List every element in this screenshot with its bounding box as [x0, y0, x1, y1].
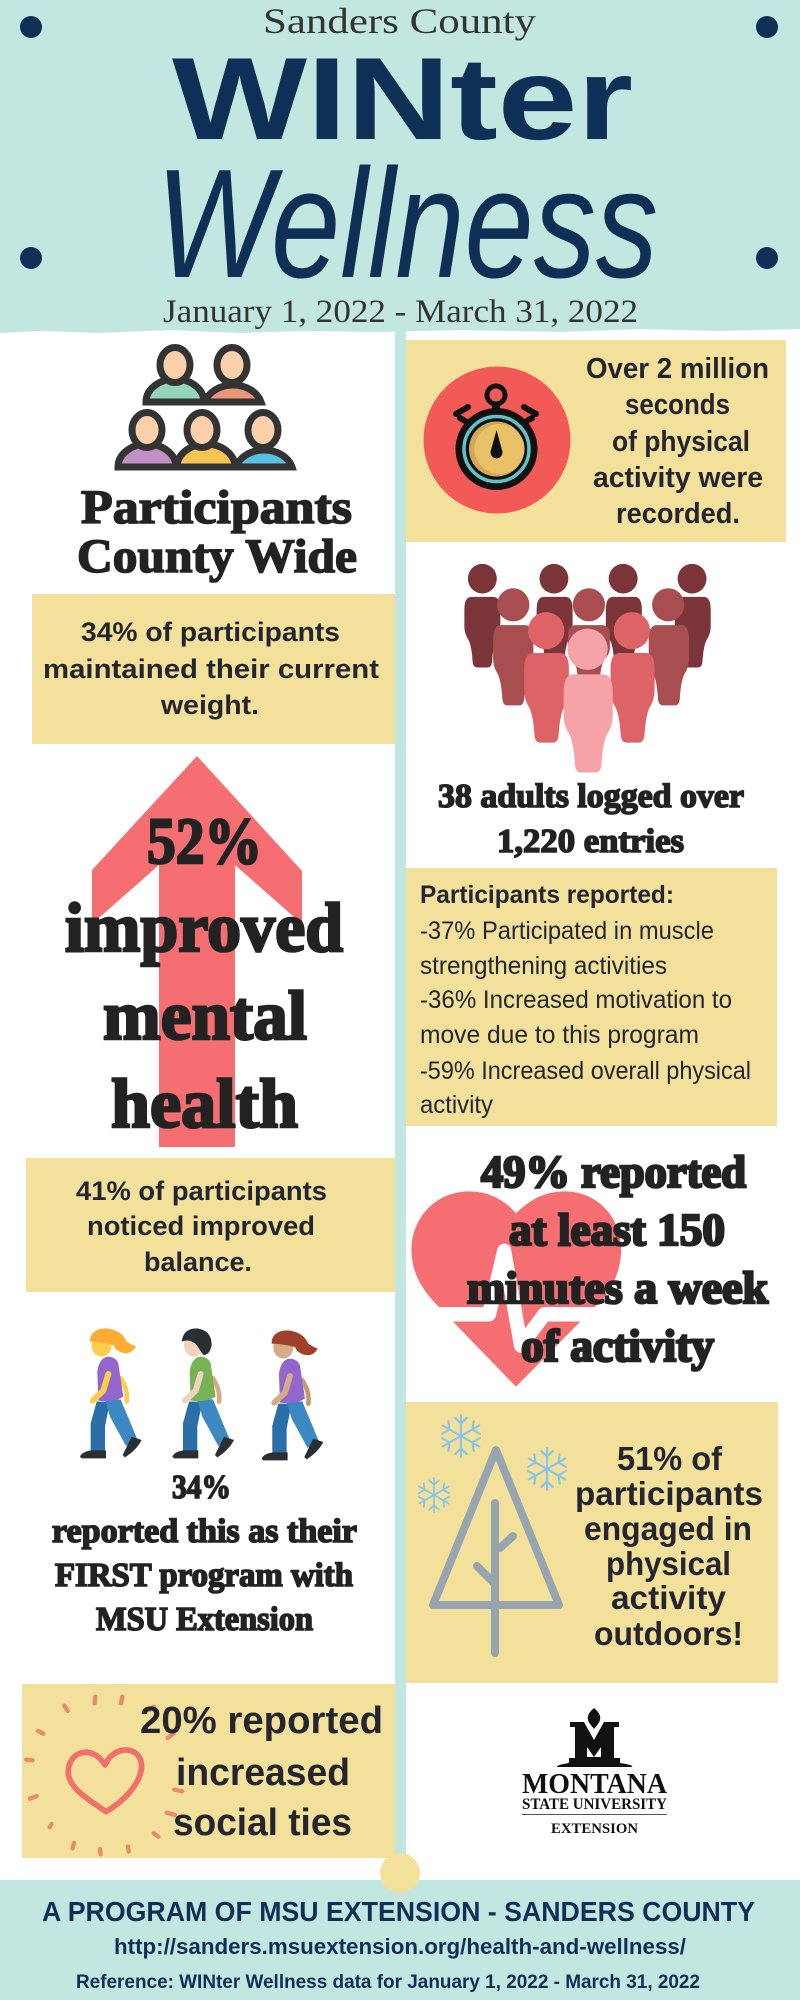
text: first program: reported this as their	[52, 1513, 357, 1550]
panel: social ties: social ties	[173, 1802, 352, 1844]
icon: heart with rays	[26, 1697, 182, 1854]
panel: seconds of physical activity	[406, 340, 786, 542]
date range: January 1, 2022 - March 31, 2022	[163, 294, 638, 330]
text: 52% improved mental health: health	[111, 1066, 298, 1143]
heading: participants county wide: County Wide	[77, 530, 357, 583]
logo: Montana State University Extension: STATE UNIVERSITY	[522, 1796, 667, 1813]
footer band	[0, 1880, 800, 2000]
panel: improved balance: balance.	[144, 1247, 252, 1277]
text: 52% improved mental health	[65, 805, 343, 1143]
heading: participants county wide: Participants	[81, 481, 352, 534]
divider end circle	[380, 1853, 420, 1893]
panel: outdoors: outdoors!	[594, 1615, 743, 1652]
footer band: http://sanders.msuextension.org/health-and-wellness/	[114, 1934, 686, 1959]
icon: group of participants	[118, 348, 292, 467]
panel: maintained weight: maintained their current	[43, 654, 379, 684]
title: Wellness: Wellness	[156, 136, 658, 310]
panel: improved balance	[26, 1158, 395, 1292]
walker two	[172, 1328, 234, 1458]
panel: social ties: increased	[176, 1752, 350, 1794]
text: 150 minutes a week: of activity	[521, 1321, 715, 1371]
text: 150 minutes a week	[467, 1147, 768, 1371]
panel: participants reported list	[406, 868, 777, 1126]
icon: M mark	[557, 1708, 632, 1767]
arrow: upward	[92, 756, 302, 1147]
text: first program: 34%	[172, 1469, 231, 1506]
text: first program: MSU Extension	[96, 1601, 313, 1638]
logo: Montana State University Extension: MONTANA	[522, 1769, 668, 1800]
icon: crowd of people	[464, 564, 711, 773]
panel: outdoors: activity	[611, 1579, 727, 1616]
panel: participants reported list: move due to this program	[420, 1021, 699, 1049]
text: 52% improved mental health: 52%	[147, 805, 262, 878]
icon: heart with pulse line	[412, 1192, 620, 1385]
panel: participants reported list: activity	[420, 1091, 493, 1119]
text: first program: FIRST program with	[55, 1557, 353, 1594]
panel: seconds of physical activity: seconds	[625, 389, 730, 421]
panel: participants reported list: strengthening activities	[420, 952, 667, 980]
text: 150 minutes a week: minutes a week	[467, 1263, 768, 1313]
panel: outdoors: 51% of	[617, 1440, 723, 1477]
panel: maintained weight	[32, 594, 395, 744]
icon: stopwatch	[424, 366, 570, 514]
text: 150 minutes a week: at least 150	[509, 1205, 725, 1255]
walker three	[262, 1330, 323, 1460]
panel: participants reported list: -37% Participated in muscle	[420, 917, 714, 945]
panel: seconds of physical activity: of physical	[612, 426, 750, 458]
text: 150 minutes a week: 49% reported	[481, 1147, 746, 1197]
text: adults logged: 1,220 entries	[497, 823, 684, 860]
logo: Montana State University Extension	[522, 1708, 668, 1837]
heading: participants county wide	[77, 481, 357, 583]
county name: Sanders County	[263, 1, 536, 41]
title: WINter: WINter	[172, 33, 633, 164]
panel: improved balance: noticed improved	[87, 1211, 315, 1241]
text: adults logged	[438, 778, 744, 860]
header band	[0, 0, 800, 334]
icon: snowflakes	[419, 1415, 566, 1512]
panel: social ties	[22, 1684, 395, 1858]
centre divider line	[395, 331, 406, 1861]
panel: outdoors: physical	[606, 1545, 731, 1582]
panel: maintained weight: 34% of participants	[81, 617, 340, 647]
panel: seconds of physical activity: Over 2 million	[586, 353, 769, 385]
footer band: Reference: WINter Wellness data for January 1, 2022 - March 31, 2022	[76, 1971, 700, 1993]
icon: winter tree	[433, 1450, 559, 1653]
panel: seconds of physical activity: recorded.	[616, 498, 740, 530]
text: 52% improved mental health: improved	[65, 890, 343, 967]
logo: Montana State University Extension: EXTENSION	[551, 1821, 638, 1837]
panel: improved balance: 41% of participants	[76, 1176, 327, 1206]
panel: social ties: 20% reported	[140, 1700, 383, 1742]
panel: outdoors: engaged in	[584, 1510, 752, 1547]
panel: participants reported list: -36% Increased motivation to	[420, 986, 732, 1014]
text: first program	[52, 1469, 357, 1638]
text: 52% improved mental health: mental	[103, 978, 307, 1055]
panel: outdoors: participants	[575, 1475, 763, 1512]
text: adults logged: 38 adults logged over	[438, 778, 744, 815]
panel: participants reported list: Participants reported:	[420, 881, 674, 909]
panel: maintained weight: weight.	[160, 690, 259, 720]
panel: participants reported list: -59% Increased overall physical	[420, 1057, 751, 1085]
panel: seconds of physical activity: activity were	[593, 462, 763, 494]
footer band: A PROGRAM OF MSU EXTENSION - SANDERS COUNTY	[42, 1896, 755, 1927]
panel: outdoors	[406, 1402, 778, 1683]
white page body with torn edge	[0, 329, 800, 1880]
walker one	[80, 1328, 142, 1458]
decorative dots	[20, 16, 778, 269]
icon: three people walking	[80, 1328, 323, 1460]
